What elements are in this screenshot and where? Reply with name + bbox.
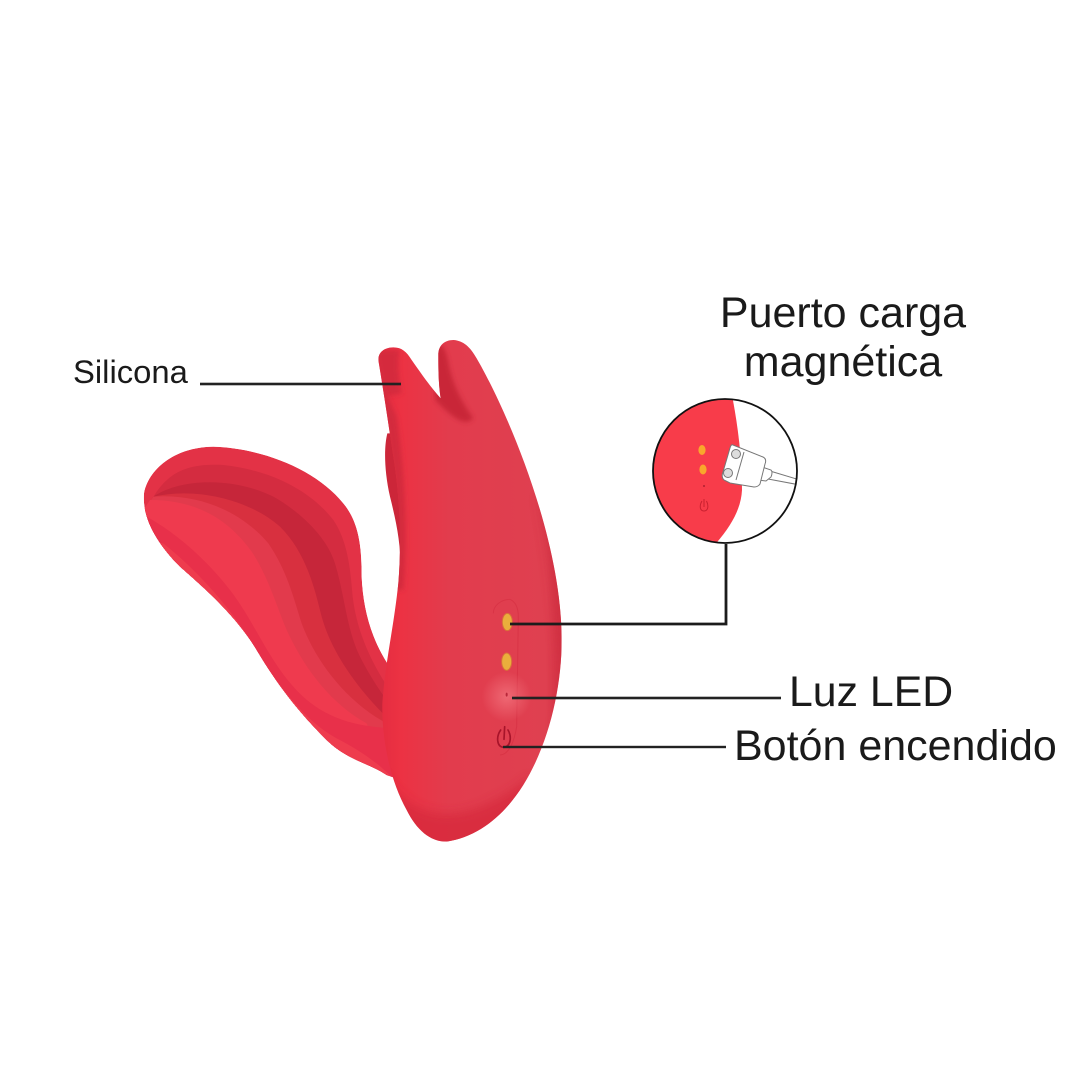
right edge shading [536,499,562,714]
control recess outline [493,599,518,755]
inner prong shading [435,343,473,422]
inset power icon [700,499,708,511]
callout: Silicona: Silicona [73,353,189,390]
inset contacts [698,445,707,474]
LED dot [506,693,508,697]
power icon [498,727,510,747]
heading: Puerto carga magnética: magnética [744,338,942,386]
LED glow [482,672,532,722]
inset red body [654,400,742,542]
heading: Puerto carga magnética: Puerto carga [720,289,966,337]
charging contact: lower [502,653,512,670]
product diagram [74,298,1055,842]
magnetic connector [722,445,800,487]
bottom shading [395,777,528,842]
leader line: port to inset [510,544,726,624]
outer prong shading [375,350,402,397]
callout: Luz LED: Luz LED [789,668,953,716]
charging contact: upper [502,613,512,631]
left edge shading [380,380,406,590]
dark side strip behind body [385,433,410,570]
inset: magnetic charger [652,398,798,544]
product illustration [130,337,570,857]
rear lobe [144,446,393,778]
front body [375,337,570,857]
callout: Puerto carga magnética [510,289,966,624]
callout: Botón encendido: Botón encendido [734,722,1057,770]
